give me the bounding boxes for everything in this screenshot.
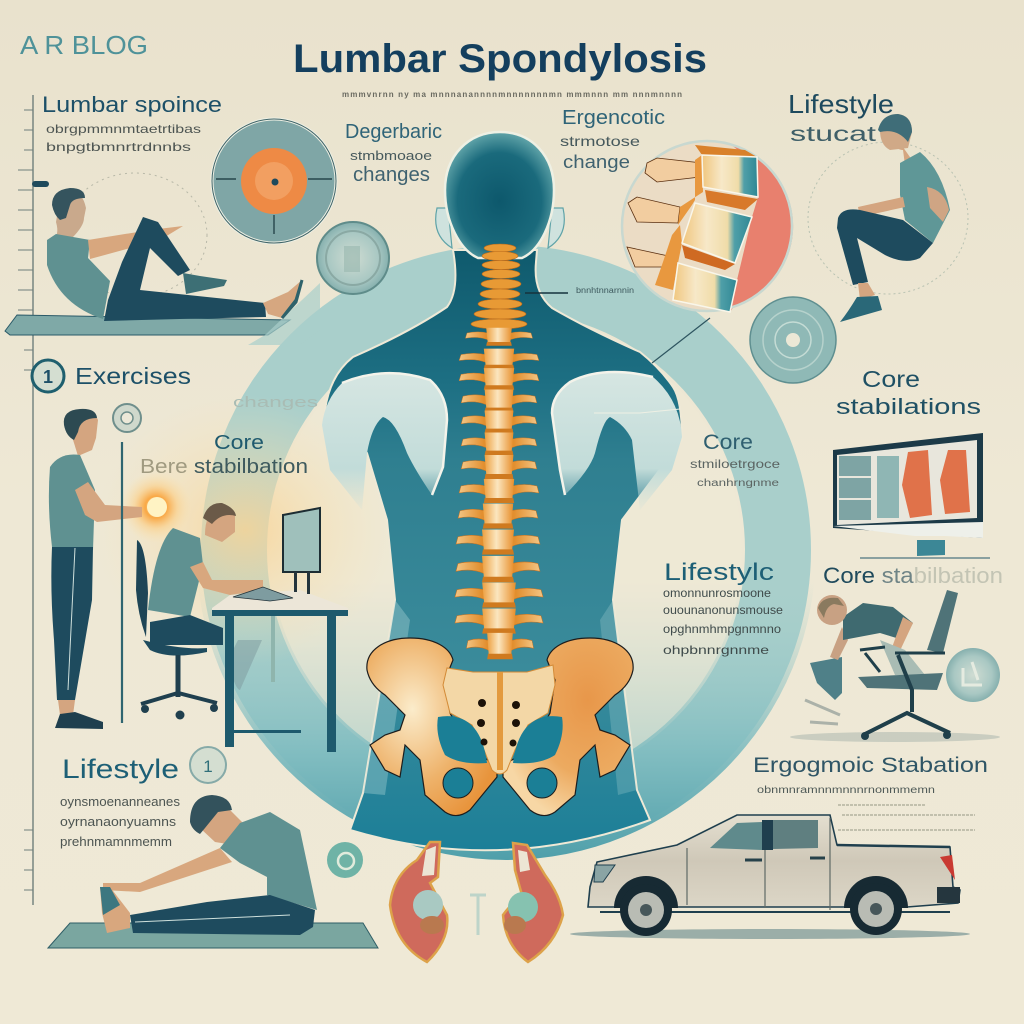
text block: ergonomic: strmotose xyxy=(560,133,640,149)
text block: lifestyle middle right: opghnmhmpgnmnno xyxy=(663,622,781,636)
heading: lifestyle left: 1 xyxy=(203,757,213,776)
left ruler xyxy=(18,95,46,905)
title: Lumbar Spondylosis xyxy=(293,37,707,81)
lifestyle heading top right: Lifestyle xyxy=(788,89,894,119)
heading: lifestyle left: Lifestyle xyxy=(62,754,179,784)
text block: lifestyle middle right: ouounanonunsmouse xyxy=(663,603,783,617)
text block: lumbar spine xyxy=(42,92,222,154)
figure: bending on office chair xyxy=(790,590,1000,742)
text block: lifestyle middle right xyxy=(663,559,783,657)
heading: ergonomic stabilisation: Ergogmoic Stabation xyxy=(753,754,988,777)
heading: core stabilations right: stabilations xyxy=(836,394,981,419)
text block: degenerative changes xyxy=(345,121,442,186)
text block: degenerative changes: stmbmoaoe xyxy=(350,148,432,163)
callout text: spine: bnnhtnnarnnin xyxy=(576,286,634,295)
heading: core stabilations right: Core xyxy=(862,366,920,392)
heading: ergonomic stabilisation: obnmnramnnmnnnrnonmmemn xyxy=(757,785,935,796)
text block: degenerative changes: changes xyxy=(353,164,430,186)
lifestyle heading top right: stucat xyxy=(790,123,876,146)
heading: exercises: Exercises xyxy=(75,363,191,389)
text block: core centre right: chanhrngnme xyxy=(697,478,780,489)
callout line: close-up xyxy=(652,318,710,363)
text block: core centre right: stmiloetrgoce xyxy=(690,457,780,471)
heading: core stabilisation left: Core xyxy=(214,432,264,454)
figure: desk worker xyxy=(136,503,348,752)
faint text lines above truck xyxy=(838,805,975,830)
text block: lifestyle middle right: ohpbnnrgnnme xyxy=(663,643,769,657)
text block: lumbar spine: Lumbar spoince xyxy=(42,92,222,117)
icon: teal swirl xyxy=(327,842,363,878)
callout line: spine xyxy=(525,292,568,294)
vertebrae close-up xyxy=(622,141,793,312)
monitor with scans xyxy=(833,433,990,558)
figure: seated sit-up on mat xyxy=(5,173,320,345)
title underline text: mmmvnrnn ny ma mnnnanannnnmnnnnnnnmn mmmnnn mm nnnmnnnn xyxy=(342,90,682,99)
left shoulder blade xyxy=(322,373,447,510)
pickup truck xyxy=(570,815,970,939)
heading: exercises: 1 xyxy=(43,367,53,387)
lifestyle heading top right xyxy=(788,89,894,146)
warm glow wash xyxy=(95,395,395,665)
text block: lifestyle left: oynsmoenanneanes xyxy=(60,794,181,809)
spine xyxy=(455,244,543,659)
text block: lifestyle middle right: omonnunrosmoone xyxy=(663,586,771,600)
brand label: A R BLOG xyxy=(20,30,148,60)
text block: lifestyle middle right: Lifestylc xyxy=(664,559,774,586)
heading: core stabilations right xyxy=(836,366,981,419)
text block: core centre right: Core xyxy=(703,431,753,454)
central ring xyxy=(196,240,816,860)
faint central glyph xyxy=(470,895,486,935)
figure: standing with glow xyxy=(49,404,192,729)
text block: lifestyle left: prehnmamnmemm xyxy=(60,834,172,849)
icon: small disc left xyxy=(317,222,389,294)
heading: ergonomic stabilisation xyxy=(753,754,988,796)
text block: ergonomic: change xyxy=(563,152,630,172)
figure: seated forward stretch on mat xyxy=(48,795,378,948)
icon: small disc right xyxy=(750,297,836,383)
text block: lifestyle left: oyrnanaonyuamns xyxy=(60,814,177,829)
text block: degenerative changes: Degerbaric xyxy=(345,121,442,143)
heading: core stab right faded: Core stabilbation xyxy=(823,563,1003,588)
right shoulder blade xyxy=(552,372,682,510)
text block: core centre right xyxy=(690,431,780,489)
text block: lumbar spine: obrgpmmnmtaetrtibas xyxy=(46,122,201,136)
pelvis xyxy=(367,638,633,816)
heading: core stabilisation left xyxy=(140,432,308,478)
text block: ergonomic xyxy=(560,107,665,172)
heading: lifestyle left xyxy=(62,747,226,784)
faded label: changes: changes xyxy=(233,394,318,411)
diagram: disc cross section xyxy=(212,119,336,243)
organ icons bottom xyxy=(390,842,563,962)
heading: exercises xyxy=(32,360,191,392)
heading: core stabilisation left: Bere stabilbation xyxy=(140,456,308,478)
text block: lifestyle left xyxy=(60,794,181,849)
text block: lumbar spine: bnpgtbmnrtrdnnbs xyxy=(46,140,191,154)
text block: ergonomic: Ergencotic xyxy=(562,107,665,129)
figure: seated forward top right xyxy=(808,114,968,322)
body silhouette xyxy=(325,132,682,850)
